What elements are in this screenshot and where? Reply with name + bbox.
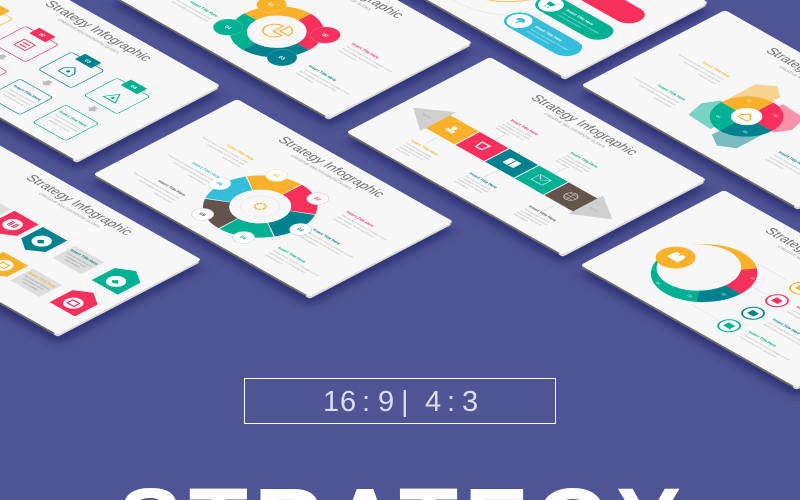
- text: green block: Insert Title Here: [189, 0, 220, 18]
- grey text box 1: [52, 246, 104, 274]
- text: red block: There are many variations: [505, 122, 533, 138]
- text box teal: Insert Title Here: [12, 84, 43, 102]
- subtitle: CREATIVE MULTIPURPOSE SLIDES: [542, 112, 607, 148]
- text: teal block: [298, 228, 361, 263]
- text: teal block: ipsum available, but the majority have: [762, 324, 800, 346]
- text: red block: ipsum available, but the majority have: [336, 216, 375, 238]
- text: red block: ipsum available, but the majority have: [341, 48, 380, 70]
- text: red block: Insert Title Here: [350, 42, 382, 60]
- text: orange block: There are many variations of passages of lorem: [677, 54, 725, 81]
- text: brown block: Insert Title Here: [527, 205, 559, 222]
- text: green block: [554, 151, 600, 177]
- text: blue block: There are many variations of passages of lorem: [166, 154, 215, 181]
- title: Strategy Infographic: [41, 0, 156, 63]
- badge 02: 02: [319, 33, 330, 38]
- text: orange block: suffered alteration: [221, 157, 241, 168]
- arrow right: [568, 196, 629, 229]
- text: green block: Insert Title Here: [569, 151, 600, 169]
- text: brown block: have suffered: [512, 213, 529, 222]
- slide: process boxes: [0, 0, 229, 170]
- text: teal block: [453, 172, 500, 197]
- text: teal block: There are many variations: [463, 175, 492, 191]
- text: brown block: ipsum available, but the majority have: [138, 180, 177, 202]
- text: blue block: suffered alteration: [187, 174, 207, 186]
- text box teal: [0, 79, 53, 115]
- arrow left: Title here: [421, 113, 433, 120]
- text box green: available but majority: [48, 120, 71, 133]
- slide: spiral puzzle: [571, 190, 800, 397]
- connectors: [426, 117, 594, 211]
- text: green block: There are many variations of passages of lorem: [742, 334, 790, 361]
- text box teal: available but majority: [2, 94, 25, 107]
- grey text box 1: of passages of lorem: [64, 255, 87, 268]
- pill: green: [529, 0, 620, 43]
- text: red block: have suffered: [494, 127, 510, 136]
- ring labels: 03: [686, 294, 693, 298]
- slide: four-petal ring: [572, 10, 800, 217]
- text: red block: available but the majority: [498, 125, 525, 141]
- ring labels: 03: [741, 130, 749, 134]
- ratio box: 16 : 9 | 4 : 3: [323, 386, 478, 418]
- text: orange block: [394, 139, 441, 164]
- badge 03: [285, 221, 316, 238]
- text: green block: suffered alteration: [653, 97, 673, 108]
- text: teal block: suffered alteration: [294, 72, 315, 84]
- step 4 green: [515, 166, 568, 195]
- icon ring teal: [738, 305, 769, 322]
- text: teal block: suffered alteration: [764, 158, 784, 170]
- text: green block: ipsum available, but the majority have: [170, 1, 209, 23]
- text: orange block: of passages of lorem ipsum: [401, 144, 430, 160]
- pill: blue: Insert Title Here: [533, 25, 565, 43]
- badge 04: [207, 16, 249, 39]
- box 01: [0, 0, 18, 36]
- text: green block: available but the majority: [558, 158, 585, 173]
- pill: green: Insert Title Here: [565, 9, 596, 26]
- text: red block: [786, 305, 800, 338]
- text: orange block: There are many variations of passages of lorem: [201, 136, 249, 163]
- badge 06: [204, 175, 235, 192]
- text: green block: ipsum available, but the majority have: [738, 336, 777, 358]
- text: green block: of passages of lorem ipsum: [561, 156, 590, 173]
- text: blue block: Insert Title Here: [191, 161, 222, 179]
- text box red: [0, 53, 7, 89]
- grey text box 2: There are many variations: [23, 275, 51, 291]
- connector lines: [687, 264, 791, 320]
- text: brown block: suffered alteration: [153, 192, 173, 204]
- badge 06: 06: [214, 181, 224, 187]
- badge 03: [261, 46, 303, 69]
- step 1 orange: [426, 115, 479, 144]
- text: red block: Insert Title Here: [509, 119, 541, 136]
- pill: blue: of lorem ipsum available: [525, 30, 551, 45]
- text: green block: Insert Title Here: [656, 84, 688, 102]
- text: orange block: suffered alteration: [697, 74, 717, 85]
- text: brown block: [124, 168, 188, 204]
- text: orange block: ipsum available, but the majority have: [682, 61, 721, 83]
- slide: pentagons: [0, 137, 210, 344]
- text: orange block: have suffered: [394, 148, 411, 157]
- ring chart: [709, 96, 784, 137]
- icon: house: [738, 112, 755, 121]
- title: Strategy Infographic: [527, 93, 642, 157]
- text: orange block: There are many variations: [405, 142, 433, 158]
- text: teal block: There are many variations of passages of lorem: [302, 68, 350, 95]
- text: teal block: [764, 150, 800, 185]
- badge 01: [261, 167, 292, 184]
- text: green block: There are many variations of passages of lorem: [632, 77, 680, 104]
- icon: gear: [252, 202, 268, 211]
- ratio box: [244, 378, 556, 424]
- grey text box 2: of passages of lorem: [22, 278, 45, 291]
- badge 04: 04: [222, 25, 233, 30]
- badge 03: 03: [276, 55, 287, 61]
- donut chart: [175, 160, 345, 253]
- grey text box 2: Insert Title Here: [27, 271, 58, 289]
- text: green block: Insert Title Here: [747, 330, 779, 348]
- text: teal block: suffered alteration: [298, 236, 319, 247]
- text: teal block: of passages of lorem ipsum: [460, 177, 489, 193]
- text: green block: [263, 246, 327, 281]
- text: green block: [624, 73, 688, 108]
- text: teal block: There are many variations of passages of lorem: [306, 232, 354, 259]
- text: teal block: [294, 64, 357, 99]
- centre disc: [218, 184, 302, 229]
- text: teal block: have suffered: [453, 180, 469, 189]
- inner cut-out: [639, 235, 759, 300]
- text: green block: There are many variations of passages of lorem: [271, 250, 320, 277]
- text: orange block: Insert Title Here: [701, 61, 732, 78]
- ring labels: 02: [720, 293, 727, 296]
- text: orange block: available but the majority: [398, 146, 425, 161]
- ring labels: [714, 99, 779, 134]
- translucent pentagons: [670, 74, 800, 158]
- badge 03: 03: [295, 227, 305, 233]
- grey text box 1: Insert Title Here: [69, 248, 100, 266]
- text: red block: [332, 210, 395, 245]
- icon: pie chart: [258, 20, 297, 41]
- arrow left: [395, 98, 456, 131]
- text: brown block: Insert Title Here: [156, 179, 188, 197]
- grey text box 1: ipsum available: [63, 258, 81, 269]
- text box green: of passages of lorem ipsum: [49, 116, 78, 132]
- icon ring green: [714, 317, 745, 334]
- pentagon teal: [13, 227, 67, 256]
- box 04: [84, 75, 156, 114]
- title: Strategy Infographic: [22, 173, 137, 237]
- text: green block: [738, 330, 797, 363]
- title: Strategy Infographic: [274, 135, 389, 199]
- text: red block: [494, 119, 541, 144]
- badge 05: 05: [197, 212, 207, 218]
- pill: red: [560, 0, 651, 27]
- text: green block: suffered alteration: [263, 254, 284, 265]
- text box green: Insert Title Here: [58, 110, 89, 128]
- badge 04: 04: [238, 235, 248, 241]
- pentagon orange: [0, 252, 28, 281]
- centre circle: [724, 105, 769, 129]
- text: red block: There are many variations of passages of lorem: [340, 214, 388, 241]
- pill: blue: [497, 9, 589, 60]
- step 5 brown: [544, 182, 597, 211]
- text: red block: [337, 42, 400, 77]
- text: brown block: [512, 205, 559, 230]
- text box teal: There are many variations: [8, 88, 36, 104]
- slide: six-segment donut: [84, 99, 462, 306]
- slide: arrow timeline: [337, 57, 715, 264]
- step 3 teal: [485, 149, 538, 178]
- orange head circle: [647, 242, 704, 273]
- text: green block: ipsum available, but the majority have: [267, 252, 307, 274]
- pentagon red bottom: [50, 286, 106, 316]
- box 02: [0, 23, 64, 62]
- text: orange block: [193, 133, 256, 168]
- text: red block: Insert Title Here: [345, 210, 376, 228]
- text: teal block: Insert Title Here: [468, 172, 500, 189]
- ring labels: 04: [654, 281, 662, 285]
- subtitle: CREATIVE MULTIPURPOSE SLIDES: [289, 154, 354, 190]
- slide: pills infographic: [339, 0, 722, 87]
- ring labels: 01: [745, 99, 752, 103]
- text: orange block: ipsum available, but the majority have: [206, 144, 245, 166]
- ring labels: 02: [772, 114, 779, 118]
- text: green block: Insert Title Here: [277, 246, 308, 264]
- arrow right: Title here: [588, 206, 600, 213]
- grey text box 1: There are many variations: [65, 252, 93, 268]
- subtitle: CREATIVE MULTIPURPOSE SLIDES: [37, 192, 102, 228]
- pill: green: of lorem ipsum available: [556, 14, 582, 29]
- text: orange block: Insert Title Here: [409, 139, 441, 157]
- text: blue block: ipsum available, but the majority have: [172, 162, 211, 184]
- text: orange block: [669, 50, 732, 85]
- text: teal block: ipsum available, but the majority have: [298, 70, 337, 92]
- text: red block: of passages of lorem ipsum: [501, 124, 530, 140]
- badge 04: [228, 229, 259, 246]
- text: teal block: Insert Title Here: [311, 228, 343, 246]
- box 03: 03: [82, 59, 93, 64]
- badge 02: [302, 190, 333, 207]
- text: green block: have suffered: [554, 160, 570, 169]
- text box teal: of passages of lorem ipsum: [3, 90, 32, 106]
- orange inner circle: [421, 0, 598, 16]
- text: red block: suffered alteration: [337, 50, 357, 61]
- text: brown block: There are many variations of passages of lorem: [132, 172, 180, 199]
- text: brown block: available but the majority: [516, 212, 543, 227]
- grey text box 2: [10, 268, 62, 297]
- ring labels: 01: [749, 276, 756, 280]
- text: blue block: [158, 151, 222, 186]
- box 04: 04: [128, 85, 138, 90]
- text: green block: There are many variations: [564, 155, 593, 170]
- text: green block: ipsum available, but the majority have: [638, 84, 677, 106]
- text: teal block: available but the majority: [457, 179, 484, 194]
- badge 02: [304, 24, 346, 47]
- badge 01: 01: [271, 173, 281, 179]
- text: brown block: There are many variations: [523, 208, 551, 224]
- text box green: There are many variations: [53, 114, 82, 130]
- text box green: [33, 105, 99, 141]
- spiral chart: [651, 244, 757, 302]
- ring labels: 04: [714, 115, 722, 119]
- step 2 red: [455, 132, 509, 161]
- text: teal block: Insert Title Here: [307, 64, 339, 82]
- slide: four-segment ring: [103, 0, 481, 127]
- text: brown block: of passages of lorem ipsum: [519, 210, 548, 226]
- subtitle: CREATIVE MULTIPURPOSE SLIDES: [56, 18, 121, 54]
- pill: blue: There are many variations of passages: [529, 28, 569, 51]
- badge 05: [187, 206, 218, 223]
- pill: green: There are many variations of passages: [560, 12, 601, 35]
- badge 01: [250, 0, 293, 16]
- grey text box 2: ipsum available: [21, 281, 39, 291]
- pentagon red top: [0, 211, 39, 240]
- box 02: 02: [36, 33, 47, 38]
- arrows down: [0, 27, 101, 113]
- badge 01: 01: [266, 2, 276, 8]
- badge 02: 02: [312, 196, 322, 202]
- ring labels: [654, 253, 757, 309]
- text: red block: suffered alteration: [332, 218, 352, 230]
- text: orange block: Insert Title Here: [225, 144, 256, 161]
- icon ring red: [761, 292, 793, 309]
- large grey circle: [390, 0, 654, 37]
- box 03: [38, 49, 110, 88]
- text: teal block: ipsum available, but the majority have: [302, 234, 341, 256]
- ring chart: [222, 2, 331, 61]
- pentagon green: [92, 264, 149, 295]
- text: red block: There are many variations of passages of lorem: [345, 46, 393, 73]
- grey box far left: [0, 194, 11, 221]
- icon ring orange: [785, 280, 800, 297]
